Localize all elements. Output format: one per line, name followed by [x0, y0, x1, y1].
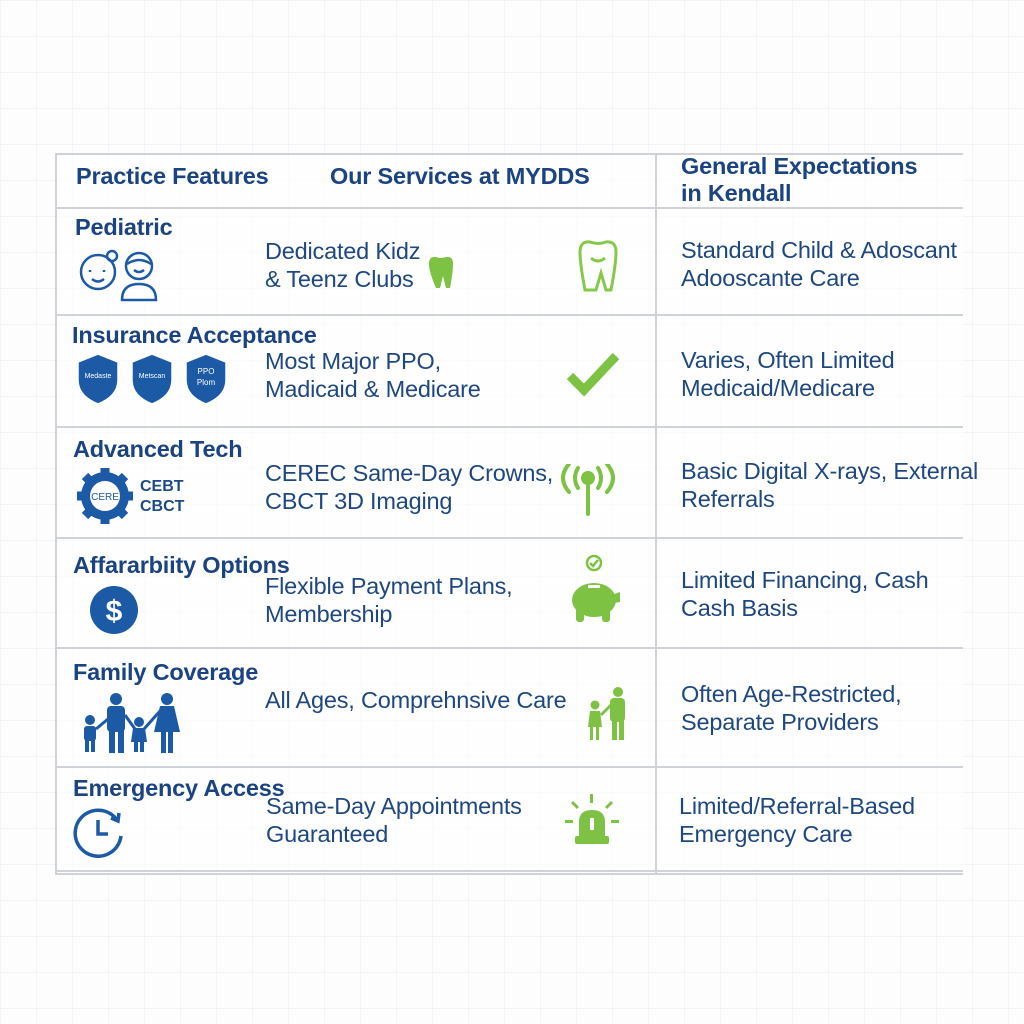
icon: shields: Medaste — [85, 373, 112, 380]
service text: Madicaid & Medicare — [265, 376, 481, 402]
service text — [266, 793, 522, 847]
expectation text — [681, 237, 957, 291]
expectation text: Standard Child & Adoscant — [681, 237, 957, 263]
service text — [265, 460, 553, 514]
expectation text: Referrals — [681, 486, 775, 512]
header: practice features: Practice Features — [76, 163, 269, 189]
expectation text — [681, 458, 978, 512]
icon: kids — [80, 250, 158, 302]
service text: Most Major PPO, — [265, 348, 441, 374]
service text: Membership — [265, 601, 392, 627]
heading: Affararbiity Options — [73, 552, 290, 578]
icon: gear CERE — [77, 468, 185, 524]
expectation text: Often Age-Restricted, — [681, 681, 901, 707]
icon: outline tooth — [578, 240, 618, 292]
expectation text — [681, 567, 928, 621]
icon: dollar: $ — [106, 595, 123, 628]
icon: dollar — [90, 586, 138, 634]
header: general expectations: General Expectations — [681, 153, 917, 179]
header: general expectations — [681, 153, 917, 206]
heading: Pediatric — [75, 214, 172, 240]
expectation text: Varies, Often Limited — [681, 347, 894, 373]
icon: gear CERE: CBCT — [140, 498, 185, 515]
service text: CEREC Same-Day Crowns, — [265, 460, 553, 486]
icon: family — [84, 693, 180, 753]
icon: check — [566, 352, 620, 396]
service text — [265, 348, 481, 402]
expectation text: Emergency Care — [679, 821, 853, 847]
row: affordability — [73, 552, 928, 634]
heading: Advanced Tech — [73, 436, 242, 462]
expectation text: Separate Providers — [681, 709, 879, 735]
service text: Flexible Payment Plans, — [265, 573, 512, 599]
icon: shields: Plom — [197, 378, 215, 387]
icon: parent and child — [588, 687, 625, 740]
header: general expectations: in Kendall — [681, 180, 791, 206]
icon: clock — [73, 808, 123, 858]
row: family — [73, 659, 901, 753]
icon: shields — [78, 354, 226, 403]
expectation text: Basic Digital X-rays, External — [681, 458, 978, 484]
icon: gear CERE: CERE — [91, 492, 119, 503]
expectation text — [679, 793, 915, 847]
table frame — [55, 153, 963, 875]
service text: Guaranteed — [266, 821, 388, 847]
expectation text: Limited/Referral-Based — [679, 793, 915, 819]
service text — [265, 238, 420, 292]
service text — [265, 573, 512, 627]
service text: All Ages, Comprehnsive Care — [265, 687, 567, 713]
service text: Dedicated Kidz — [265, 238, 420, 264]
row: advanced tech — [73, 436, 978, 524]
icon: gear CERE: CEBT — [140, 478, 184, 495]
expectation text — [681, 681, 901, 735]
icon: signal — [560, 464, 616, 516]
expectation text: Adooscante Care — [681, 265, 860, 291]
expectation text — [681, 347, 894, 401]
service text: CBCT 3D Imaging — [265, 488, 452, 514]
icon: alarm — [565, 794, 619, 844]
expectation text: Limited Financing, Cash — [681, 567, 928, 593]
icon: piggy bank — [572, 554, 620, 622]
icon: solid tooth — [429, 256, 453, 288]
service text: & Teenz Clubs — [265, 266, 414, 292]
header: our services: Our Services at MYDDS — [330, 163, 590, 189]
icon: shields: PPO — [198, 367, 214, 376]
expectation text: Medicaid/Medicare — [681, 375, 875, 401]
heading: Insurance Acceptance — [72, 322, 317, 348]
heading: Family Coverage — [73, 659, 258, 685]
row: emergency — [73, 775, 915, 858]
row: pediatric — [75, 214, 957, 302]
service text: Same-Day Appointments — [266, 793, 522, 819]
expectation text: Cash Basis — [681, 595, 798, 621]
icon: shields: Metscan — [139, 373, 165, 380]
heading: Emergency Access — [73, 775, 284, 801]
row: insurance — [72, 322, 894, 403]
